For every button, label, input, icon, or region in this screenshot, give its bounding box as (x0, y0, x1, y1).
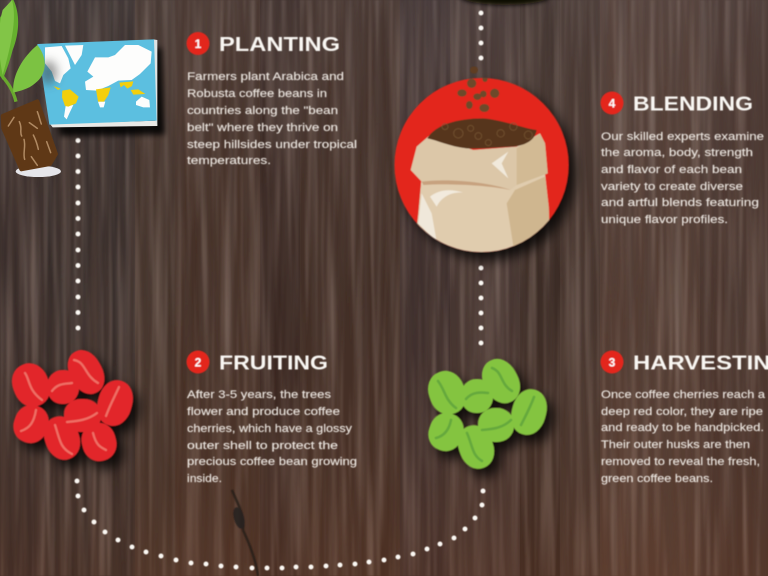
blending description: unique flavor profiles. (601, 214, 728, 226)
badge 1: 1 (195, 37, 202, 51)
fruiting description: precious coffee bean growing (187, 456, 357, 468)
falling bean above circle (470, 66, 478, 74)
fruiting description: After 3-5 years, the trees (187, 389, 332, 401)
step 2: fruiting text (186, 350, 357, 485)
icon: red coffee cherries (6, 344, 137, 465)
blending description (601, 131, 764, 226)
heading planting: PLANTING (219, 33, 340, 56)
harvesting description (601, 389, 765, 485)
planting description: temperatures. (187, 155, 271, 167)
planting description: steep hillsides under tropical (187, 139, 357, 151)
blending description: and artful blends featuring (601, 197, 759, 209)
heading harvesting: HARVESTING (633, 352, 768, 374)
heading fruiting: FRUITING (219, 352, 328, 374)
icon: seedling in soil plug (0, 0, 61, 177)
harvesting description: deep red color, they are ripe (601, 406, 763, 418)
step 3: harvesting text (600, 350, 768, 485)
harvesting description: removed to reveal the fresh, (601, 456, 760, 468)
coffee belt yellow areas (53, 81, 145, 107)
falling beans (457, 76, 499, 112)
heading blending: BLENDING (633, 92, 753, 116)
badge 2 (186, 350, 210, 374)
harvesting description: Their outer husks are then (601, 439, 750, 451)
map shading behind leaf (40, 61, 57, 85)
planting description: Farmers plant Arabica and (187, 71, 344, 83)
harvesting description: Once coffee cherries reach a (601, 389, 765, 401)
sack folded top (410, 132, 548, 182)
fruiting description: inside. (187, 473, 222, 485)
plug base plate (16, 166, 61, 177)
leaves (0, 0, 18, 80)
fruiting description: cherries, which have a glossy (187, 423, 353, 435)
dotted path: blending to next step (478, 10, 484, 60)
step 4: blending text (600, 92, 764, 226)
fruiting description: outer shell to protect the (187, 440, 338, 452)
dotted path: planting to fruiting (76, 138, 80, 330)
icon: green coffee beans (423, 353, 551, 473)
harvesting description: green coffee beans. (601, 473, 713, 485)
badge 1 (186, 32, 210, 55)
planting description: belt" where they thrive on (187, 122, 338, 134)
roots (8, 112, 51, 165)
badge 4 (600, 92, 624, 114)
badge 2: 2 (195, 356, 202, 370)
blending description: and flavor of each bean (601, 164, 742, 176)
step 1: planting text (186, 32, 357, 167)
dotted path: harvesting to blending (478, 266, 484, 346)
badge 3 (600, 350, 624, 374)
blending description: variety to create diverse (601, 181, 743, 193)
beans in sack (427, 118, 537, 149)
fruiting description (187, 389, 357, 485)
dotted path: fruiting to harvesting (74, 478, 486, 570)
icon shadow from previous step at top edge (460, 0, 550, 5)
planting description: countries along the "bean (187, 105, 338, 117)
sack body (413, 173, 550, 257)
icon: coffee sack in red circle (394, 76, 568, 257)
icon: world map booklet (37, 39, 165, 136)
stem (0, 73, 16, 102)
planting description: Robusta coffee beans in (187, 88, 327, 100)
blending description: Our skilled experts examine (601, 131, 764, 143)
badge 3: 3 (609, 356, 616, 370)
badge 4: 4 (609, 96, 616, 110)
continents (45, 45, 152, 119)
planting description (187, 71, 357, 167)
blending description: the aroma, body, strength (601, 147, 753, 159)
soil plug (3, 101, 56, 169)
harvesting description: and ready to be handpicked. (601, 422, 764, 434)
fruiting description: flower and produce coffee (187, 406, 340, 418)
